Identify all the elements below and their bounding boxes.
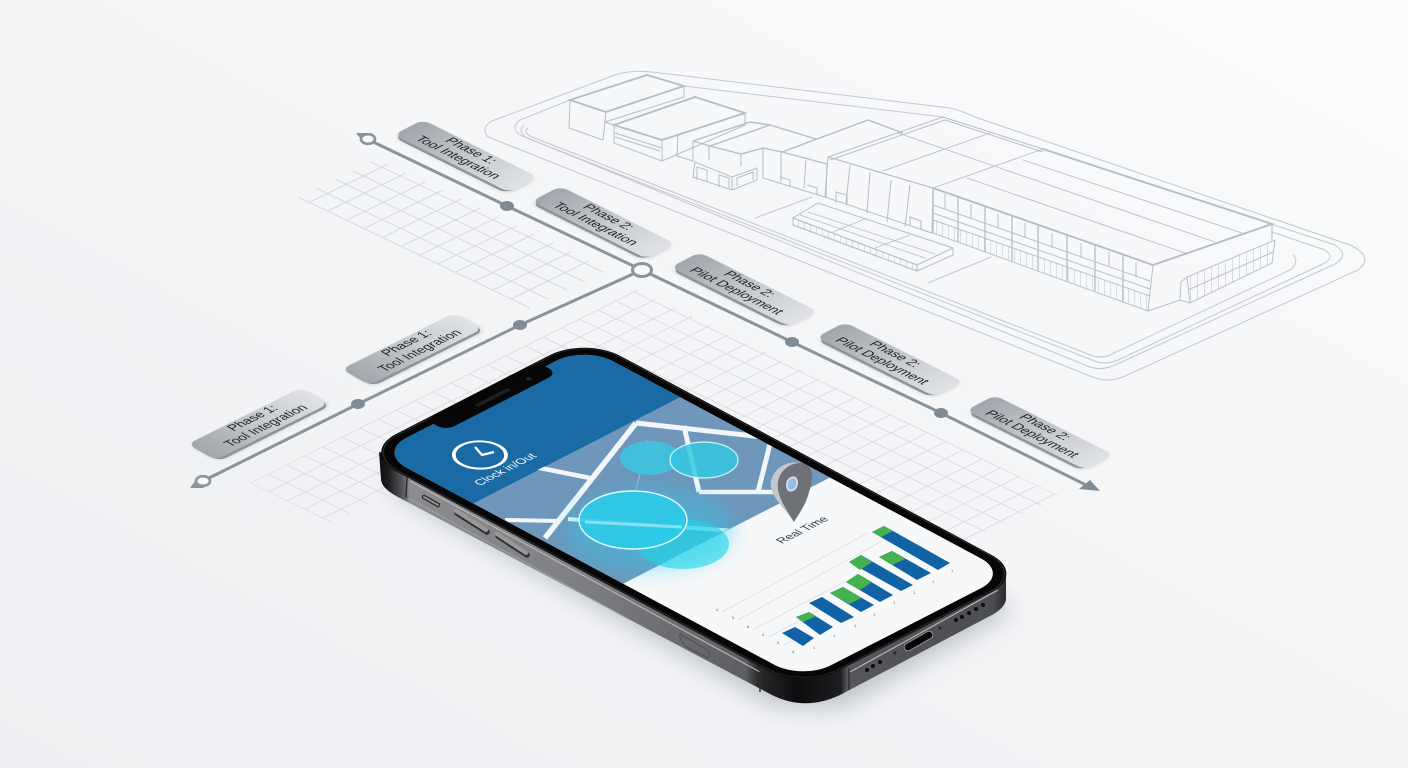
chart axis ticks — [716, 568, 954, 654]
chart axis ticks: 1 — [913, 590, 916, 595]
axis line — [367, 139, 1090, 487]
chart axis ticks: 5 — [732, 615, 735, 620]
west blocks — [569, 75, 903, 197]
geofence circle, large outlined — [579, 491, 687, 549]
chart axis ticks: 6 — [747, 624, 750, 629]
label: Phase 2 Pilot Deployment, first: Phase 2: — [720, 269, 780, 299]
icon: location pin — [771, 462, 812, 522]
start marker — [190, 476, 210, 488]
chart axis ticks: 0 — [777, 640, 780, 645]
chart axis ticks: 1 — [893, 600, 896, 605]
chart axis ticks: 1 — [854, 623, 857, 628]
icon: clock — [452, 440, 508, 470]
label: Phase 2 Tool Integration — [529, 186, 677, 261]
chart axis ticks: 1 — [813, 645, 816, 650]
map zone — [465, 393, 839, 588]
label: Phase 2 Pilot Deployment, third: Phase 2: — [1016, 412, 1075, 442]
building site plan line drawing — [485, 71, 1365, 380]
label: Phase 2 Pilot Deployment, second — [814, 322, 964, 398]
chart axis ticks: 4 — [762, 632, 765, 637]
road over large circle — [585, 522, 682, 527]
label: Phase 1 Tool Integration, middle left — [341, 312, 485, 387]
label: Phase 2 Tool Integration: Phase 2: — [579, 202, 639, 232]
label: Phase 2 Pilot Deployment, third — [964, 395, 1114, 471]
arrowhead — [1079, 480, 1100, 491]
screen zones — [394, 354, 993, 672]
label: Phase 1 Tool Integration, lower left — [187, 387, 331, 462]
phone front bezel — [361, 337, 1027, 689]
metal side walls — [379, 452, 1006, 703]
chart gridlines — [722, 533, 882, 645]
label: Phase 1 Tool Integration, lower left: Tool Integration — [220, 402, 311, 449]
label: Phase 2 Pilot Deployment, first: Pilot Deployment — [686, 265, 788, 316]
clock in/out label: Clock in/Out — [470, 451, 541, 487]
label: Phase 1 Tool Integration, upper: Tool Integration — [412, 134, 505, 181]
label: Phase 1 Tool Integration, upper: Phase 1: — [442, 135, 501, 165]
map roads — [505, 423, 780, 538]
phone side details: buttons, bands, ports — [406, 477, 998, 692]
chart axis ticks: 1 — [873, 612, 876, 617]
chart axis ticks: 1 — [833, 633, 836, 638]
real time label: Real Time — [772, 514, 832, 545]
junction node — [632, 264, 652, 276]
label: Phase 1 Tool Integration, middle left: Phase 1: — [377, 328, 435, 358]
label: Phase 1 Tool Integration, upper — [391, 120, 539, 194]
loading canopy — [793, 203, 953, 271]
site boundary and access roads — [485, 71, 1365, 380]
label: Phase 1 Tool Integration, lower left: Phase 1: — [223, 403, 281, 433]
label: Phase 2 Tool Integration: Tool Integration — [549, 200, 642, 247]
phone screen — [394, 354, 993, 672]
chart axis ticks: 4 — [792, 649, 795, 654]
upper floor grid — [298, 162, 603, 308]
geofence circle, lower soft — [637, 519, 729, 569]
milestone node — [934, 408, 948, 418]
notch — [426, 362, 558, 431]
speaker — [474, 388, 511, 407]
start marker — [356, 133, 375, 144]
label: Phase 2 Pilot Deployment, third: Pilot Deployment — [981, 408, 1083, 459]
chart axis ticks: 4 — [716, 607, 719, 612]
geofence circle, small soft — [620, 441, 680, 475]
timeline: upper axis — [356, 133, 1100, 491]
white chart zone — [394, 354, 993, 672]
main hall — [825, 117, 1272, 311]
milestone node — [351, 399, 365, 409]
chart axis ticks: 1 — [951, 568, 954, 573]
front facade with window rows — [933, 188, 1150, 311]
label: Phase 2 Pilot Deployment, second: Pilot Deployment — [831, 335, 933, 386]
milestone node — [500, 201, 514, 211]
timeline: lower axis — [190, 264, 652, 488]
smartphone — [361, 337, 1027, 708]
label: Phase 2 Pilot Deployment, second: Phase 2: — [866, 339, 925, 369]
geofence circle, small outlined — [670, 442, 738, 478]
infographic canvas — [190, 70, 1366, 724]
camera — [524, 377, 533, 381]
milestone node — [785, 337, 799, 347]
label: Phase 2 Pilot Deployment, first — [668, 252, 819, 328]
stacked bar chart — [782, 526, 950, 646]
chart axis ticks: 1 — [932, 579, 935, 584]
milestone node — [513, 320, 527, 330]
label: Phase 1 Tool Integration, middle left: Tool Integration — [374, 327, 465, 374]
lower floor grid — [250, 290, 1058, 542]
glazed end facade — [1180, 240, 1275, 303]
blue clock zone — [394, 354, 680, 504]
phone drop shadow — [392, 470, 1012, 708]
axis line — [203, 270, 642, 481]
map glow — [565, 488, 735, 572]
